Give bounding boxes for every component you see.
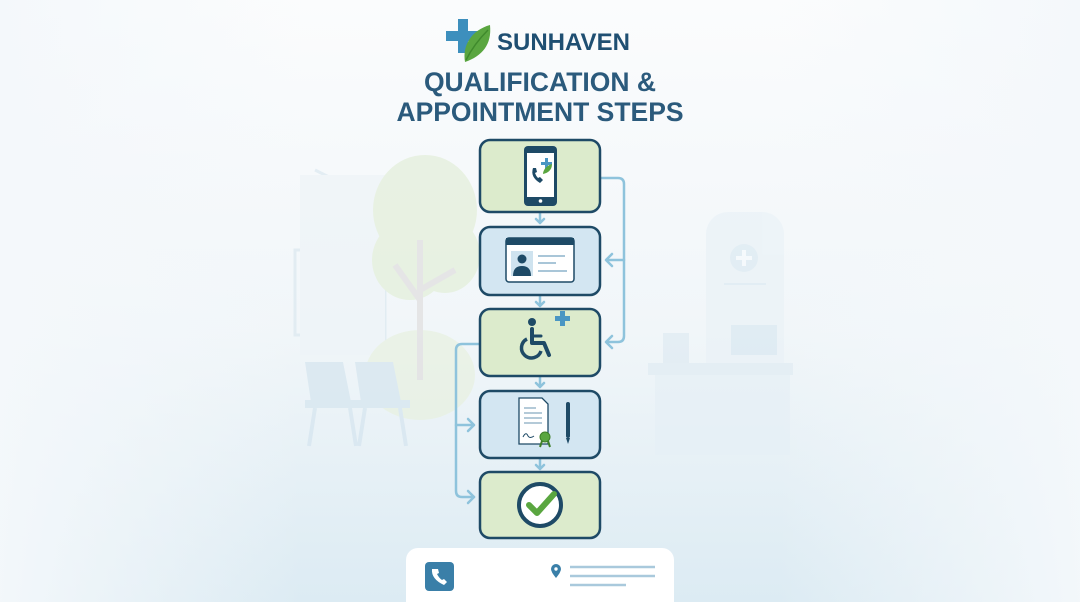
icon: id card	[506, 238, 574, 282]
connectors	[456, 178, 624, 503]
reception	[706, 212, 784, 452]
icon: document with seal and pen	[519, 398, 570, 447]
contact card	[406, 548, 674, 602]
step 3: accessibility	[480, 309, 600, 376]
icon: location pin with address lines	[551, 564, 655, 585]
step 5: confirmation check	[480, 472, 600, 538]
title: APPOINTMENT STEPS	[396, 97, 684, 127]
chairs	[305, 362, 410, 446]
step 4: signed document	[480, 391, 600, 458]
header: logo and brand	[446, 19, 630, 62]
brand name: SUNHAVEN	[497, 29, 630, 56]
title	[396, 67, 684, 127]
tree	[365, 155, 480, 420]
icon: wheelchair with plus	[521, 311, 570, 358]
icon: phone	[524, 146, 557, 206]
step 1: phone contact	[480, 140, 600, 212]
building	[295, 170, 385, 350]
icon: check circle	[519, 484, 561, 526]
background scene	[295, 155, 793, 455]
icon: phone button	[425, 562, 454, 591]
icon: medical cross with leaf	[446, 19, 490, 62]
step 2: ID card	[480, 227, 600, 295]
title: QUALIFICATION &	[424, 67, 656, 97]
